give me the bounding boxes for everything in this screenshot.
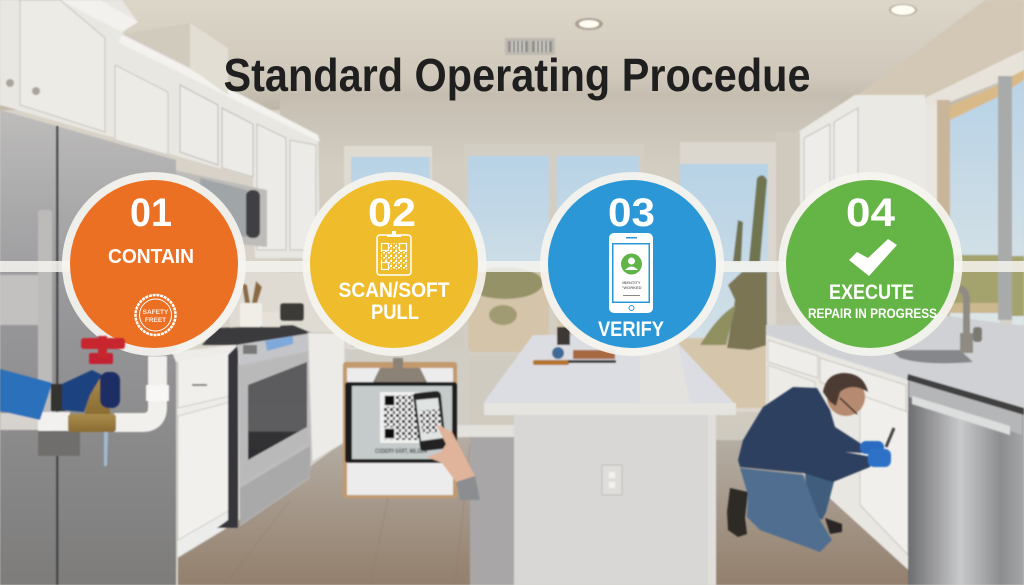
step 03: verify (540, 172, 724, 356)
desert ground (468, 272, 549, 352)
jeans (805, 472, 835, 520)
number 03: 03 (608, 191, 655, 235)
backsplash (230, 272, 345, 332)
QR code (380, 392, 421, 443)
icon: phone with identity check: "WORKED (621, 285, 642, 290)
illustration: hand closing shut-off valve (0, 336, 169, 466)
fridge (0, 110, 176, 585)
illustration: clipboard with tablet QR code and phone (343, 358, 480, 500)
number 04: 04 (846, 191, 896, 235)
recessed lights and vent (505, 4, 917, 55)
icon: phone with identity check: IBENTITY (622, 280, 641, 285)
island items (533, 360, 569, 365)
label: EXECUTE (829, 281, 914, 304)
label: SCAN/SOFT (338, 279, 450, 302)
cactus (749, 175, 767, 262)
lower left cabinet (172, 345, 236, 558)
water drip (104, 432, 108, 466)
bulkhead box (122, 23, 190, 68)
right counter and cabinets (766, 286, 1024, 585)
right upper cabinets (776, 95, 925, 312)
clipboard (343, 362, 457, 498)
valve (68, 414, 116, 432)
icon: safety seal: SAFETY (143, 309, 169, 316)
tablet caption: CODERY-SÄRT, MILGEN (375, 448, 427, 455)
title: Standard Operating Procedue (224, 49, 810, 101)
icon: clipboard QR (377, 231, 411, 275)
icon: phone with identity check (609, 233, 653, 313)
sink (890, 350, 973, 363)
number 01: 01 (130, 191, 172, 235)
back wall (280, 96, 840, 441)
step 01: contain (62, 172, 246, 356)
pipe (0, 413, 40, 430)
right window (925, 50, 1024, 340)
microwave (150, 165, 267, 247)
step 02: scan / soft pull (302, 172, 486, 356)
number 02: 02 (368, 191, 416, 235)
icon: safety seal (136, 295, 176, 335)
middle cabinets (308, 333, 517, 462)
sublabel: REPAIR IN PROGRESS (808, 306, 937, 321)
faucet (958, 286, 973, 353)
counter utensils (240, 281, 304, 327)
step 04: execute (778, 172, 962, 356)
gloves and tool (886, 428, 894, 447)
ceiling (0, 0, 1024, 110)
back windows (344, 142, 776, 412)
icon: check mark (849, 239, 897, 276)
tablet (345, 382, 457, 463)
sleeve and glove (0, 369, 52, 420)
step 02: scan / soft pull: PULL (371, 301, 419, 324)
left upper cabinets (0, 0, 320, 258)
range (202, 325, 315, 528)
floor (178, 437, 520, 585)
illustration: technician kneeling at cabinet (727, 373, 894, 552)
head (827, 378, 865, 416)
boots (727, 488, 748, 537)
connector line (0, 261, 1024, 272)
hand (427, 424, 475, 482)
dishwasher (907, 374, 1024, 585)
label: VERIFY (598, 318, 664, 341)
phone (413, 391, 446, 451)
right sloped wall (855, 0, 1024, 98)
label: CONTAIN (108, 245, 194, 268)
shirt and arms (738, 387, 872, 482)
island (484, 327, 736, 585)
icon: safety seal: FREET (145, 317, 166, 324)
